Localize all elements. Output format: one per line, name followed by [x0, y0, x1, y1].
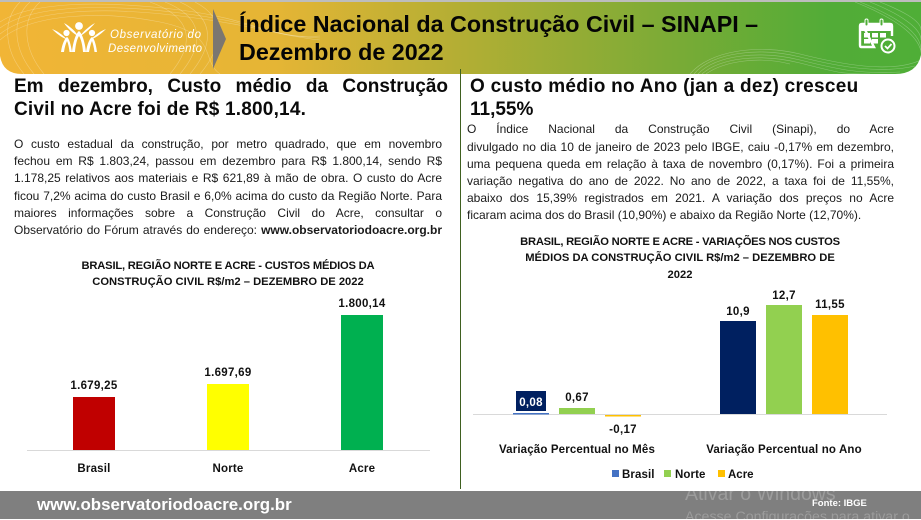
year group: 12,7: [772, 290, 796, 302]
title: Índice Nacional da Construção Civil – SINAPI –: [239, 11, 758, 37]
left paragraph: fechou em R$ 1.803,24, passou em dezembro para R$ 1.800,14, sendo R$: [14, 154, 442, 168]
right paragraph: O Índice Nacional da Construção Civil (Sinapi), do Acre: [467, 122, 894, 136]
right heading: [470, 76, 858, 120]
chevron: [213, 9, 226, 69]
logo text: Observatório do: [110, 29, 202, 41]
right paragraph: [467, 122, 894, 222]
legend: Acre: [728, 469, 754, 481]
left bar chart: [27, 298, 430, 475]
footer website: www.observatoriodoacre.org.br: [37, 495, 292, 514]
title: Dezembro de 2022: [239, 38, 444, 64]
right paragraph: uma pequena queda em relação à taxa de novembro (0,17%). Foi a primeira: [467, 157, 894, 171]
bar: Norte: [204, 367, 252, 475]
right paragraph: variação negativa do ano de 2022. No ano de 2022, a taxa foi de 11,55%,: [467, 174, 894, 188]
left paragraph: Observatório do Fórum através do endereço: www.observatoriodoacre.org.br: [14, 223, 442, 237]
left heading: Em dezembro, Custo médio da Construção: [14, 76, 448, 97]
bar: Brasil: 1.679,25: [70, 380, 118, 392]
right paragraph: ficaram acima dos do Brasil (10,90%) e abaixo da Região Norte (12,70%).: [467, 208, 861, 222]
right heading: 11,55%: [470, 99, 533, 120]
logo text: Desenvolvimento: [108, 43, 203, 55]
icon: logo figures: [52, 22, 106, 52]
right chart title: MÉDIOS DA CONSTRUÇÃO CIVIL R$/m2 – DEZEMBRO DE: [525, 252, 835, 264]
right paragraph: abaixo dos 15,39% registrados em 2021. A variação dos preços no Acre: [467, 191, 894, 205]
left paragraph: maiores informações sobre a Construção Civil do Acre, consultar o: [14, 206, 442, 220]
month group: 0,67: [565, 392, 589, 404]
left paragraph: 1.178,25 relativos aos materiais e R$ 621,89 à mão de obra. O custo do Acre: [14, 171, 442, 185]
icon: calendar: [860, 19, 894, 52]
source: Fonte: IBGE: [812, 498, 867, 509]
bar: Norte: 1.697,69: [204, 367, 252, 379]
legend: [612, 469, 754, 481]
left heading: [14, 76, 448, 120]
bar: Acre: [338, 298, 386, 475]
left paragraph: [14, 137, 442, 237]
watermark: [685, 491, 910, 519]
header banner: [0, 0, 921, 74]
legend: Brasil: [622, 469, 655, 481]
month group: [499, 391, 655, 456]
left chart title: BRASIL, REGIÃO NORTE E ACRE - CUSTOS MÉDIOS DA: [82, 260, 374, 272]
bar: Norte: Norte: [212, 463, 244, 475]
year group: 10,9: [726, 306, 750, 318]
title: [239, 11, 758, 64]
left heading: Civil no Acre foi de R$ 1.800,14.: [14, 99, 306, 120]
right chart title: [520, 235, 840, 281]
footer bar: [0, 491, 921, 519]
right chart title: 2022: [668, 269, 692, 281]
legend: Norte: [675, 469, 706, 481]
left chart title: CONSTRUÇÃO CIVIL R$/m2 – DEZEMBRO DE 2022: [92, 276, 364, 288]
right bar chart: [473, 290, 887, 481]
bar: Acre: 1.800,14: [338, 298, 386, 310]
right paragraph: divulgado no dia 10 de janeiro de 2023 pelo IBGE, caiu -0,17% em dezembro,: [467, 140, 894, 154]
bar: Brasil: Brasil: [77, 463, 111, 475]
left paragraph: ficou 7,2% acima do custo Brasil e 6,0% acima do custo da Região Norte. Para: [14, 189, 442, 203]
month group: 0,08: [519, 397, 543, 409]
logo text: [108, 29, 203, 55]
left paragraph: O custo estadual da construção, por metro quadrado, que em novembro: [14, 137, 442, 151]
month group: Variação Percentual no Mês: [499, 444, 655, 456]
year group: Variação Percentual no Ano: [706, 444, 862, 456]
divider: [460, 69, 461, 489]
month group: -0,17: [609, 424, 637, 436]
left chart title: [82, 259, 374, 288]
right heading: O custo médio no Ano (jan a dez) cresceu: [470, 76, 858, 97]
year group: 11,55: [815, 299, 845, 311]
year group: [706, 290, 862, 456]
bar: Brasil: [70, 380, 118, 475]
right chart title: BRASIL, REGIÃO NORTE E ACRE - VARIAÇÕES NOS CUSTOS: [520, 236, 840, 248]
bar: Acre: Acre: [349, 463, 375, 475]
